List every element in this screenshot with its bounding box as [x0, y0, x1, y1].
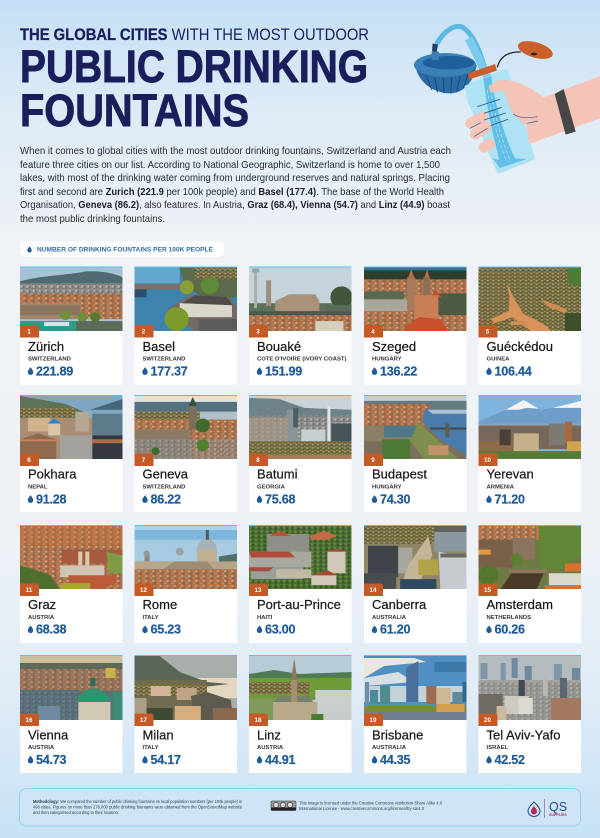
drop icon [142, 756, 148, 763]
rank badge [134, 325, 154, 338]
drop icon [257, 756, 262, 763]
country: ITALY [142, 745, 159, 751]
icon: fountain bowl [414, 43, 477, 93]
drop icon [486, 626, 492, 633]
drop icon [28, 367, 33, 375]
rank badge [364, 584, 383, 596]
city name: Rome [142, 597, 177, 612]
methodology note: Methodology: We compared the number of public drinking fountains vs local population numbers (per 100k people) in [33, 799, 243, 804]
logo: QS Supplies: SUPPLIES [549, 813, 567, 817]
country: ITALY [142, 615, 159, 621]
rank badge [249, 714, 268, 726]
value: 65.23 [150, 623, 181, 637]
photo: Milan [134, 656, 237, 720]
city name: Batumi [257, 467, 298, 482]
card: 10 Yerevan: 10 [484, 457, 491, 464]
card: 14 Canberra [364, 525, 466, 643]
card: 5 Guéckédou: 5 [486, 329, 490, 336]
intro paragraph: the most public drinking fountains. [20, 214, 165, 225]
logo: QS Supplies [528, 799, 567, 818]
rank badge [478, 454, 498, 466]
drop icon [486, 495, 492, 503]
card: 1 Zürich: 1 [27, 329, 31, 336]
photo: Pokhara [20, 396, 122, 459]
photo: Canberra [364, 526, 466, 589]
country: ISRAEL [486, 745, 509, 751]
card: 10 Yerevan [478, 395, 581, 512]
city name: Pokhara [28, 467, 77, 482]
country: GEORGIA [257, 484, 286, 490]
drop icon [28, 756, 33, 763]
photo: Zürich [20, 268, 122, 331]
title line 3: FOUNTAINS [20, 85, 249, 136]
photo: Budapest [364, 396, 466, 459]
country: AUSTRIA [28, 745, 55, 751]
photo: Port-au-Prince [249, 526, 352, 589]
card: 12 Rome [134, 525, 237, 643]
photo: Graz [20, 526, 122, 589]
intro paragraph: first and second are Zurich (221.9 per 100k people) and Basel (177.4). The base of the World Health [20, 187, 444, 198]
drop icon [142, 626, 148, 633]
licence note: This image is licensed under the Creative Commons Attribution-Share Alike 4.0 [299, 800, 443, 806]
country: AUSTRIA [28, 615, 55, 621]
value: 63.00 [265, 623, 296, 637]
card: 2 Basel: 2 [142, 329, 146, 336]
value: 86.22 [150, 492, 181, 506]
card: 11 Graz: 11 [26, 587, 33, 594]
drop icon [257, 367, 262, 375]
card: 3 Bouaké: 3 [256, 329, 260, 336]
card: 16 Vienna: 16 [26, 717, 33, 724]
rank badge [364, 714, 383, 726]
photo: Bouaké [249, 268, 352, 331]
photo: Rome [134, 526, 237, 589]
icon: water arc [437, 26, 487, 77]
rank badge [20, 584, 39, 596]
intro paragraph: lakes, with most of the drinking water coming from underground reserves and natural springs. Placing [20, 173, 450, 184]
card: 13 Port-au-Prince: 13 [255, 587, 262, 594]
rank badge [249, 454, 268, 466]
value: 61.20 [380, 623, 411, 637]
country: ARMENIA [486, 484, 515, 490]
card: 9 Budapest [364, 395, 466, 512]
photo: Vienna [20, 656, 122, 720]
footer panel [20, 788, 580, 826]
rank badge [20, 325, 39, 338]
value: 71.20 [494, 492, 525, 506]
city name: Zürich [28, 339, 64, 354]
value: 221.89 [36, 364, 73, 378]
title line 1: THE GLOBAL CITIES WITH THE MOST OUTDOOR [20, 26, 369, 44]
photo: Batumi [249, 396, 352, 459]
country: HUNGARY [372, 484, 402, 490]
rank badge [249, 325, 268, 338]
card: 19 Brisbane [364, 655, 466, 773]
photo: Yerevan [478, 396, 581, 459]
rank badge [478, 714, 498, 726]
card: 19 Brisbane: 19 [370, 717, 377, 724]
country: AUSTRIA [257, 745, 284, 751]
city name: Port-au-Prince [257, 597, 341, 612]
value: 151.99 [265, 364, 302, 378]
intro paragraph: feature three cities on our list. According to National Geographic, Switzerland is home to over 1,500 [20, 160, 440, 171]
logo: QS Supplies: QS [549, 800, 567, 814]
legend pill: NUMBER OF DRINKING FOUNTAINS PER 100K PEOPLE [37, 246, 214, 254]
city name: Yerevan [486, 467, 534, 482]
value: 74.30 [380, 492, 411, 506]
card: 8 Batumi: 8 [256, 457, 260, 464]
value: 75.68 [265, 492, 296, 506]
card: 9 Budapest: 9 [371, 457, 375, 464]
drop icon [28, 495, 33, 503]
title line 2: PUBLIC DRINKING [20, 41, 368, 92]
rank badge [478, 325, 498, 338]
intro paragraph: When it comes to global cities with the most outdoor drinking fountains, Switzerland and Austria each [20, 146, 451, 157]
title [20, 26, 369, 136]
city name: Basel [142, 339, 175, 354]
rank badge [134, 714, 154, 726]
country: SWITZERLAND [142, 356, 185, 362]
city name: Amsterdam [486, 597, 553, 612]
country: HUNGARY [372, 356, 402, 362]
card: 6 Pokhara: 6 [27, 457, 31, 464]
card: 17 Milan [134, 655, 237, 773]
rank badge [20, 454, 39, 466]
city name: Vienna [28, 727, 69, 742]
card: 8 Batumi [249, 395, 352, 512]
value: 68.38 [36, 623, 67, 637]
intro paragraph: Organisation, Geneva (86.2), also features. In Austria, Graz (68.4), Vienna (54.7) and Linz (44.9) boast [20, 200, 450, 211]
intro paragraph [20, 146, 451, 225]
drop icon [257, 495, 262, 503]
card: 1 Zürich [20, 266, 122, 384]
city name: Milan [142, 727, 174, 742]
drop icon [142, 367, 148, 375]
licence note: International License - www.creativecommons.org/licenses/by-sa/4.0 [299, 806, 425, 811]
drop icon [142, 495, 148, 503]
card: 15 Amsterdam [478, 525, 581, 643]
value: 91.28 [36, 492, 67, 506]
value: 42.52 [494, 753, 525, 767]
card: 5 Guéckédou [478, 266, 581, 384]
drop icon [28, 626, 33, 633]
drop icon [372, 495, 377, 503]
illustration: hand filling bottle from fountain [414, 26, 600, 173]
city name: Bouaké [257, 339, 301, 354]
card: 15 Amsterdam: 15 [484, 587, 491, 594]
rank badge [364, 454, 383, 466]
icon: hand [470, 76, 600, 147]
card: 18 Linz: 18 [255, 717, 262, 724]
rank badge [134, 454, 154, 466]
rank badge [364, 325, 383, 338]
value: 106.44 [494, 364, 532, 378]
country: SWITZERLAND [142, 484, 185, 490]
country: NEPAL [28, 484, 48, 490]
value: 44.35 [380, 753, 411, 767]
drop icon [486, 367, 492, 375]
card: 7 Geneva [134, 395, 237, 512]
legend pill [20, 241, 224, 257]
card: 3 Bouaké [249, 266, 353, 384]
country: COTE D'IVOIRE (IVORY COAST) [257, 356, 346, 362]
country: HAITI [257, 615, 273, 621]
card: 13 Port-au-Prince [249, 525, 352, 643]
icon: bottle cap and cord [468, 38, 555, 79]
city name: Budapest [372, 467, 427, 482]
drop icon [257, 626, 262, 633]
value: 54.73 [36, 753, 67, 767]
card: 18 Linz [249, 655, 352, 773]
card: 6 Pokhara [20, 395, 122, 512]
card: 20 Tel Aviv-Yafo [478, 655, 581, 773]
methodology note: and then categorised according to their location. [33, 810, 119, 815]
icon: water bottle [464, 69, 535, 173]
card: 4 Szeged: 4 [371, 329, 375, 336]
card: 17 Milan: 17 [140, 717, 147, 724]
drop icon [372, 756, 377, 763]
icon: creative commons badge [271, 801, 296, 810]
value: 136.22 [380, 364, 417, 378]
photo: Guéckédou [478, 268, 581, 331]
photo: Basel [134, 268, 237, 331]
country: GUINEA [486, 356, 510, 362]
icon: stream over bowl [468, 38, 487, 77]
photo: Tel Aviv-Yafo [478, 656, 581, 720]
city name: Guéckédou [486, 339, 553, 354]
card: 4 Szeged [364, 266, 466, 384]
rank badge [478, 584, 498, 596]
city name: Szeged [372, 339, 416, 354]
rank badge [134, 584, 154, 596]
licence note [299, 800, 443, 811]
card: 20 Tel Aviv-Yafo: 20 [484, 717, 491, 724]
methodology note: 496 cities. Figures on more than 276,000 public drinking fountains were obtained from the OpenStreetMap website [33, 804, 243, 810]
drop icon [372, 367, 377, 375]
rank badge [249, 584, 268, 596]
city name: Linz [257, 727, 281, 742]
drop icon [486, 756, 492, 763]
methodology note [33, 799, 243, 815]
value: 60.26 [494, 623, 525, 637]
card: 14 Canberra: 14 [370, 587, 377, 594]
photo: Geneva [134, 396, 237, 459]
drop icon [372, 626, 377, 633]
city name: Brisbane [372, 727, 423, 742]
photo: Szeged [364, 268, 466, 331]
card: 16 Vienna [20, 655, 122, 773]
city name: Tel Aviv-Yafo [486, 727, 560, 742]
value: 54.17 [150, 753, 181, 767]
card: 7 Geneva: 7 [142, 457, 146, 464]
country: SWITZERLAND [28, 356, 71, 362]
city name: Graz [28, 597, 56, 612]
photo: Brisbane [364, 656, 466, 720]
photo: Linz [249, 656, 352, 720]
card: 2 Basel [134, 266, 237, 384]
city name: Geneva [142, 467, 189, 482]
country: AUSTRALIA [372, 615, 407, 621]
value: 44.91 [265, 753, 296, 767]
country: AUSTRALIA [372, 745, 407, 751]
card: 11 Graz [20, 525, 122, 643]
card: 12 Rome: 12 [140, 587, 147, 594]
value: 177.37 [150, 364, 188, 378]
country: NETHERLANDS [486, 615, 531, 621]
photo: Amsterdam [478, 526, 581, 589]
city name: Canberra [372, 597, 427, 612]
rank badge [20, 714, 39, 726]
